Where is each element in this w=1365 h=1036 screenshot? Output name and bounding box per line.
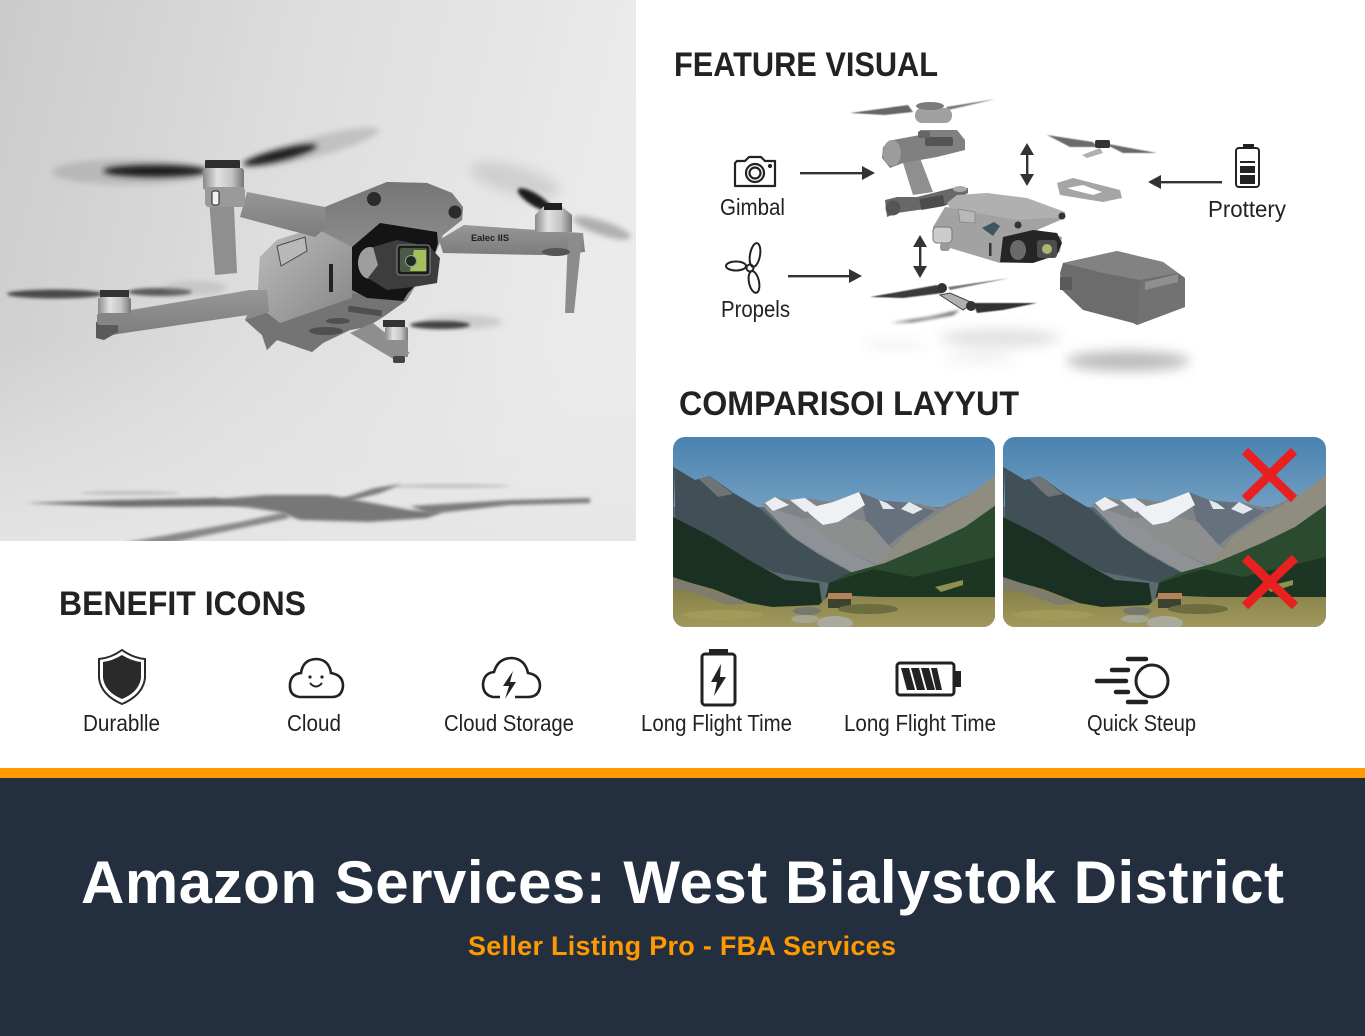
benefit: quick setup: Quick Steup [1087,710,1196,736]
icon: camera [735,157,775,186]
arrow: battery [1148,175,1222,189]
upper left leg [210,207,237,275]
accent bar [0,768,1365,778]
upper left motor [203,160,245,207]
arm label: Ealec IIS [471,233,509,243]
benefit: cloud: Cloud [287,710,341,736]
heading: comparison layout: COMPARISOI LAYYUT [679,385,1019,423]
right arm [439,225,585,255]
label: prottery: Prottery [1208,196,1286,222]
panel: exploded drone diagram [720,99,1286,371]
arrow: vertical lower [913,235,927,278]
label: propels: Propels [721,296,790,322]
icon: battery [1236,144,1259,187]
arrow: vertical upper [1020,143,1034,186]
benefit: long flight time horizontal battery [844,663,996,736]
benefit: long flight time vertical battery: Long Flight Time [641,710,792,736]
center drone body [933,193,1066,263]
belly [245,293,407,352]
benefit: durable [83,650,160,736]
benefit: cloud storage: Cloud Storage [444,710,574,736]
body silhouette [245,182,463,352]
body side [258,228,352,323]
arrow: propels [788,269,862,283]
panel: benefit icons row [83,649,1196,736]
right propeller [1047,135,1157,158]
benefit: long flight time vertical battery [641,649,792,736]
benefit: long flight time horizontal battery: Long Flight Time [844,710,996,736]
gimbal [358,240,440,290]
drone ground shadow [25,484,590,543]
heading: benefit icons: BENEFIT ICONS [59,585,306,623]
upper left propeller [52,120,381,185]
top shell [315,182,463,247]
camera housing [352,223,438,301]
benefit: cloud storage [444,658,574,736]
footer title: Amazon Services: West Bialystok District [81,849,1284,916]
upper left arm [240,192,327,237]
front right arm and motor [350,320,410,363]
benefit: cloud [287,659,343,736]
front left arm and motor [96,290,269,340]
footer subtitle: Seller Listing Pro - FBA Services [468,931,896,961]
arrow: gimbal [800,166,875,180]
sensors [367,192,381,206]
right motor and leg [535,203,582,313]
part shadows [865,329,1190,371]
icon: red cross lower [1245,558,1295,606]
lower propeller [870,278,1037,323]
panel: comparison photo right with red crosses [1003,437,1326,630]
panel: comparison photo left [673,437,996,630]
icon: propeller [726,242,762,294]
upper right propeller [471,160,632,242]
hero image: drone in flight [0,0,636,543]
lower left propeller [7,281,227,298]
gimbal part [882,130,968,217]
body hatch [277,237,307,266]
benefit: quick setup [1087,659,1196,736]
lower right propeller [410,315,502,329]
ring part [1057,178,1122,202]
icon: red cross upper [1245,451,1294,499]
arrows [788,143,1222,283]
footer banner [0,768,1365,1036]
battery part [1060,251,1185,325]
drone [7,120,633,363]
label: gimbal: Gimbal [720,194,785,220]
benefit: durable: Durablle [83,710,160,736]
heading: feature visual: FEATURE VISUAL [674,46,938,84]
top propeller [850,99,996,123]
